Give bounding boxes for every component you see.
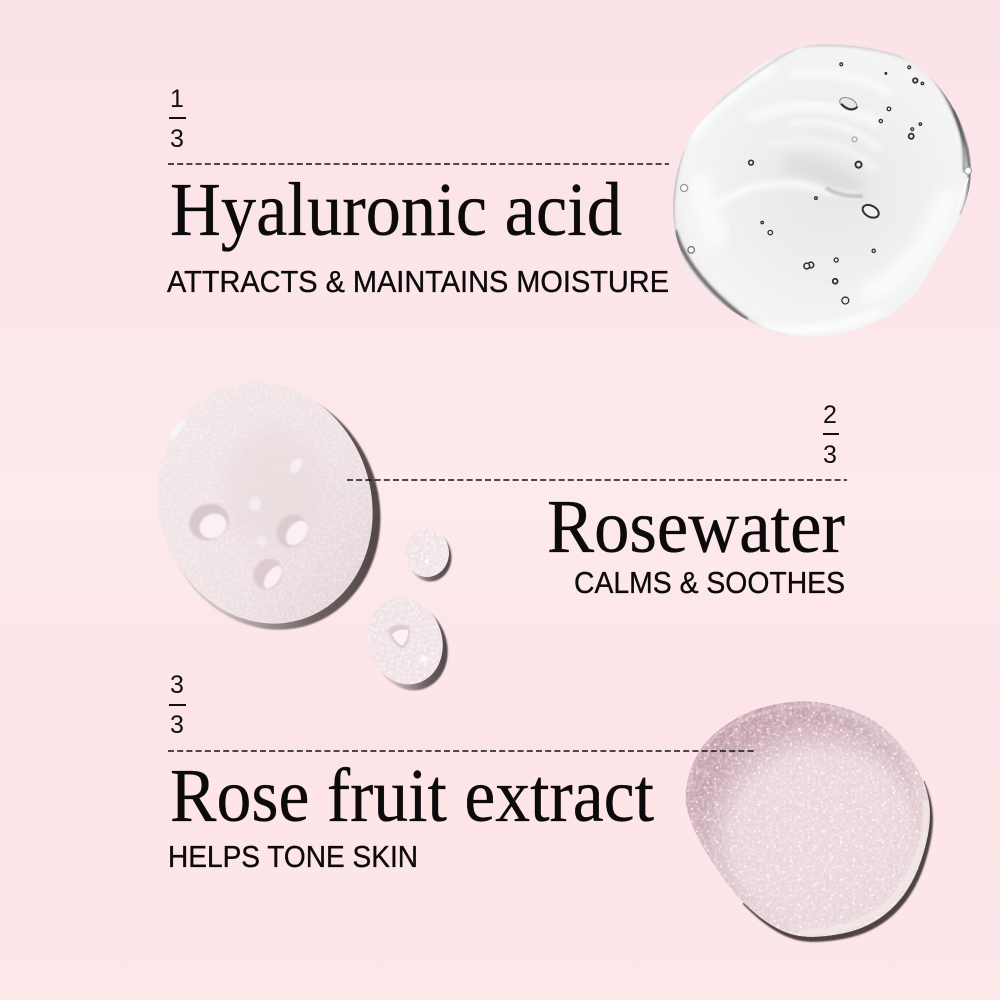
shadow: granular droplet xyxy=(742,780,934,943)
droplet: small foam xyxy=(404,528,450,578)
fraction 2/3: 3 xyxy=(823,441,837,469)
bubbles xyxy=(681,63,972,304)
droplet: large foam xyxy=(158,382,373,624)
section 2: rosewater xyxy=(347,401,847,600)
fraction 1/3: 1 xyxy=(170,85,184,113)
fraction 3/3 xyxy=(169,671,186,739)
fraction 3/3: 3 xyxy=(170,671,184,699)
heading: Rosewater: Rosewater xyxy=(547,485,845,569)
image: clear hyaluronic gel droplet xyxy=(673,44,972,338)
droplet: medium foam xyxy=(368,598,443,684)
subheading: helps tone skin: HELPS TONE SKIN xyxy=(168,839,418,874)
fraction 2/3 xyxy=(823,401,839,469)
fraction 2/3: 2 xyxy=(823,401,837,429)
heading: Rose fruit extract: Rose fruit extract xyxy=(170,754,654,838)
fraction 1/3 xyxy=(169,85,186,153)
section 1: hyaluronic acid xyxy=(167,85,669,299)
subheading: calms and soothes: CALMS & SOOTHES xyxy=(574,565,845,600)
image: rose fruit extract granular droplet xyxy=(679,694,936,946)
subheading: attracts and maintains moisture: ATTRACTS & MAINTAINS MOISTURE xyxy=(167,264,669,299)
heading: Hyaluronic acid: Hyaluronic acid xyxy=(170,168,622,252)
fraction 1/3: 3 xyxy=(170,125,184,153)
section 3: rose fruit extract xyxy=(168,671,755,874)
fraction 3/3: 3 xyxy=(170,711,184,739)
image: rosewater foam droplets xyxy=(158,382,452,692)
shadow: foam droplets xyxy=(131,360,459,700)
